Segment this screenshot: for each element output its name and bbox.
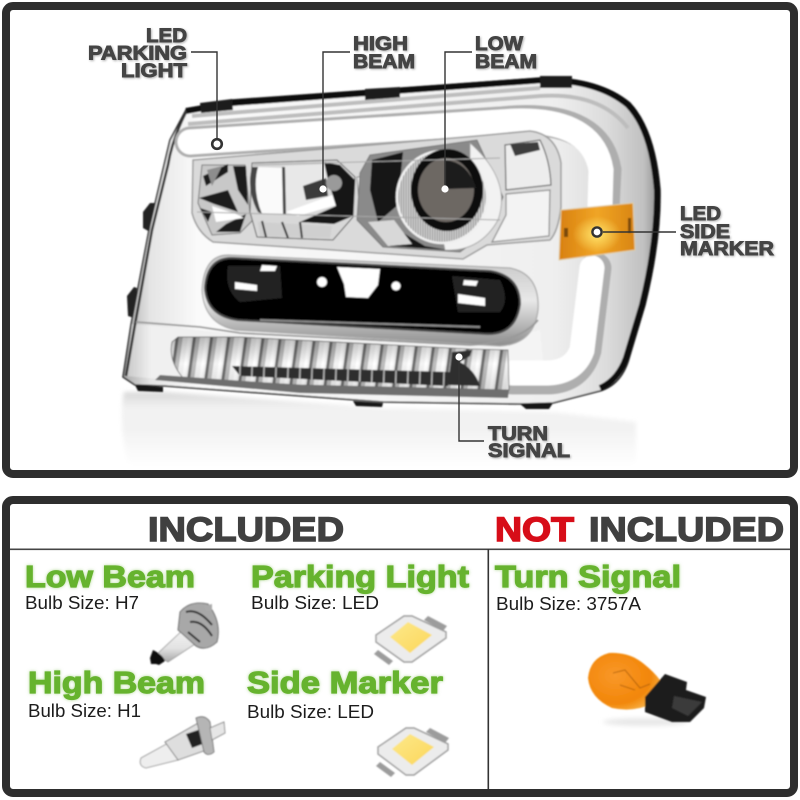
item: turn signal: Turn Signal — [495, 559, 681, 594]
callout: LED side marker: SIDE — [680, 221, 730, 243]
item: parking light — [251, 559, 469, 665]
lower lens slot black — [205, 258, 520, 334]
low beam reflector — [357, 140, 503, 252]
light tube core — [190, 121, 601, 373]
item: turn signal — [495, 559, 706, 726]
heading: not included: NOT — [495, 511, 574, 549]
callout: turn signal — [455, 353, 570, 462]
callout: LED parking light — [88, 25, 222, 149]
low beam dark shards — [370, 152, 448, 250]
header divider — [10, 548, 790, 550]
heading: not included — [495, 511, 784, 549]
left dark edge — [126, 112, 186, 376]
projector lens — [418, 158, 474, 222]
callout: high beam — [319, 33, 415, 193]
headlight reflection — [122, 392, 636, 466]
icon: amber bulb — [588, 653, 706, 726]
heading: included: INCLUDED — [148, 511, 344, 549]
icon: LED chip — [376, 728, 449, 777]
item: side marker: Bulb Size: LED — [247, 702, 374, 722]
callout: LED side marker — [592, 203, 774, 260]
item: side marker: Side Marker — [247, 665, 443, 700]
bezel crossing line — [197, 158, 500, 220]
callout: low beam: BEAM — [475, 51, 537, 73]
item: high beam: High Beam — [28, 665, 205, 700]
item: low beam: Low Beam — [25, 559, 195, 594]
turn signal lower chrome — [155, 375, 509, 398]
projector ring — [397, 151, 487, 243]
right cell lower — [492, 190, 550, 242]
slot inner dark grey blocks — [227, 266, 505, 312]
item: parking light: Bulb Size: LED — [251, 593, 379, 613]
turn signal dark grid — [232, 366, 450, 386]
callout: LED side marker: MARKER — [680, 238, 774, 260]
icon: H7 bulb — [150, 603, 218, 665]
lower lip shading — [126, 324, 545, 395]
turn signal crystal lens — [171, 337, 509, 390]
upper housing bezel — [192, 131, 561, 259]
mounting clips — [127, 203, 156, 318]
icon: H1 bulb — [140, 717, 225, 768]
callout: LED parking light: LED — [146, 25, 187, 47]
top mount tabs — [200, 76, 572, 113]
item: high beam — [28, 665, 225, 768]
callout: LED side marker: LED — [680, 203, 721, 225]
item: turn signal: Bulb Size: 3757A — [496, 594, 641, 614]
callout: LED parking light: LIGHT — [121, 60, 187, 82]
high beam reflector — [250, 160, 355, 240]
callout: low beam: LOW — [475, 33, 524, 55]
projector outer chrome — [440, 143, 502, 250]
bumper crease — [136, 320, 538, 345]
dark top and right edge — [186, 80, 657, 388]
right cell upper shard — [510, 142, 540, 156]
item: low beam: Bulb Size: H7 — [25, 593, 139, 613]
housing body — [123, 78, 660, 404]
callout: LED parking light: PARKING — [88, 42, 187, 64]
lens highlight — [445, 160, 476, 189]
callout: high beam: HIGH — [353, 33, 408, 55]
callout: high beam: BEAM — [353, 51, 415, 73]
headlight assembly — [123, 76, 660, 409]
projector black — [411, 149, 483, 231]
column divider — [488, 549, 489, 789]
turn signal shading — [171, 337, 509, 390]
item: parking light: Parking Light — [251, 559, 469, 594]
slot white cutout — [337, 267, 380, 298]
amber side marker — [559, 203, 635, 260]
item: high beam: Bulb Size: H1 — [28, 701, 141, 721]
top chrome strips — [188, 88, 628, 128]
item: side marker — [247, 665, 449, 777]
left reflector — [198, 164, 253, 235]
callout: low beam — [441, 33, 537, 193]
panel: bulb table — [6, 500, 794, 793]
item: low beam — [25, 559, 218, 665]
callout: turn signal: SIGNAL — [488, 440, 570, 462]
turn signal right bulb recess — [448, 350, 480, 386]
slot bottom strip — [260, 320, 480, 327]
callout: turn signal: TURN — [488, 423, 548, 445]
light tube — [190, 121, 606, 379]
right cell upper — [505, 140, 551, 190]
slot white highlights — [235, 265, 485, 306]
icon: LED chip — [374, 616, 447, 665]
heading: not included: INCLUDED — [589, 511, 784, 549]
feet — [135, 385, 553, 409]
lower lens slot chrome ring — [202, 255, 538, 346]
chrome shard — [368, 220, 412, 246]
panel: headlight photo frame — [6, 6, 794, 474]
center tube — [357, 176, 384, 217]
